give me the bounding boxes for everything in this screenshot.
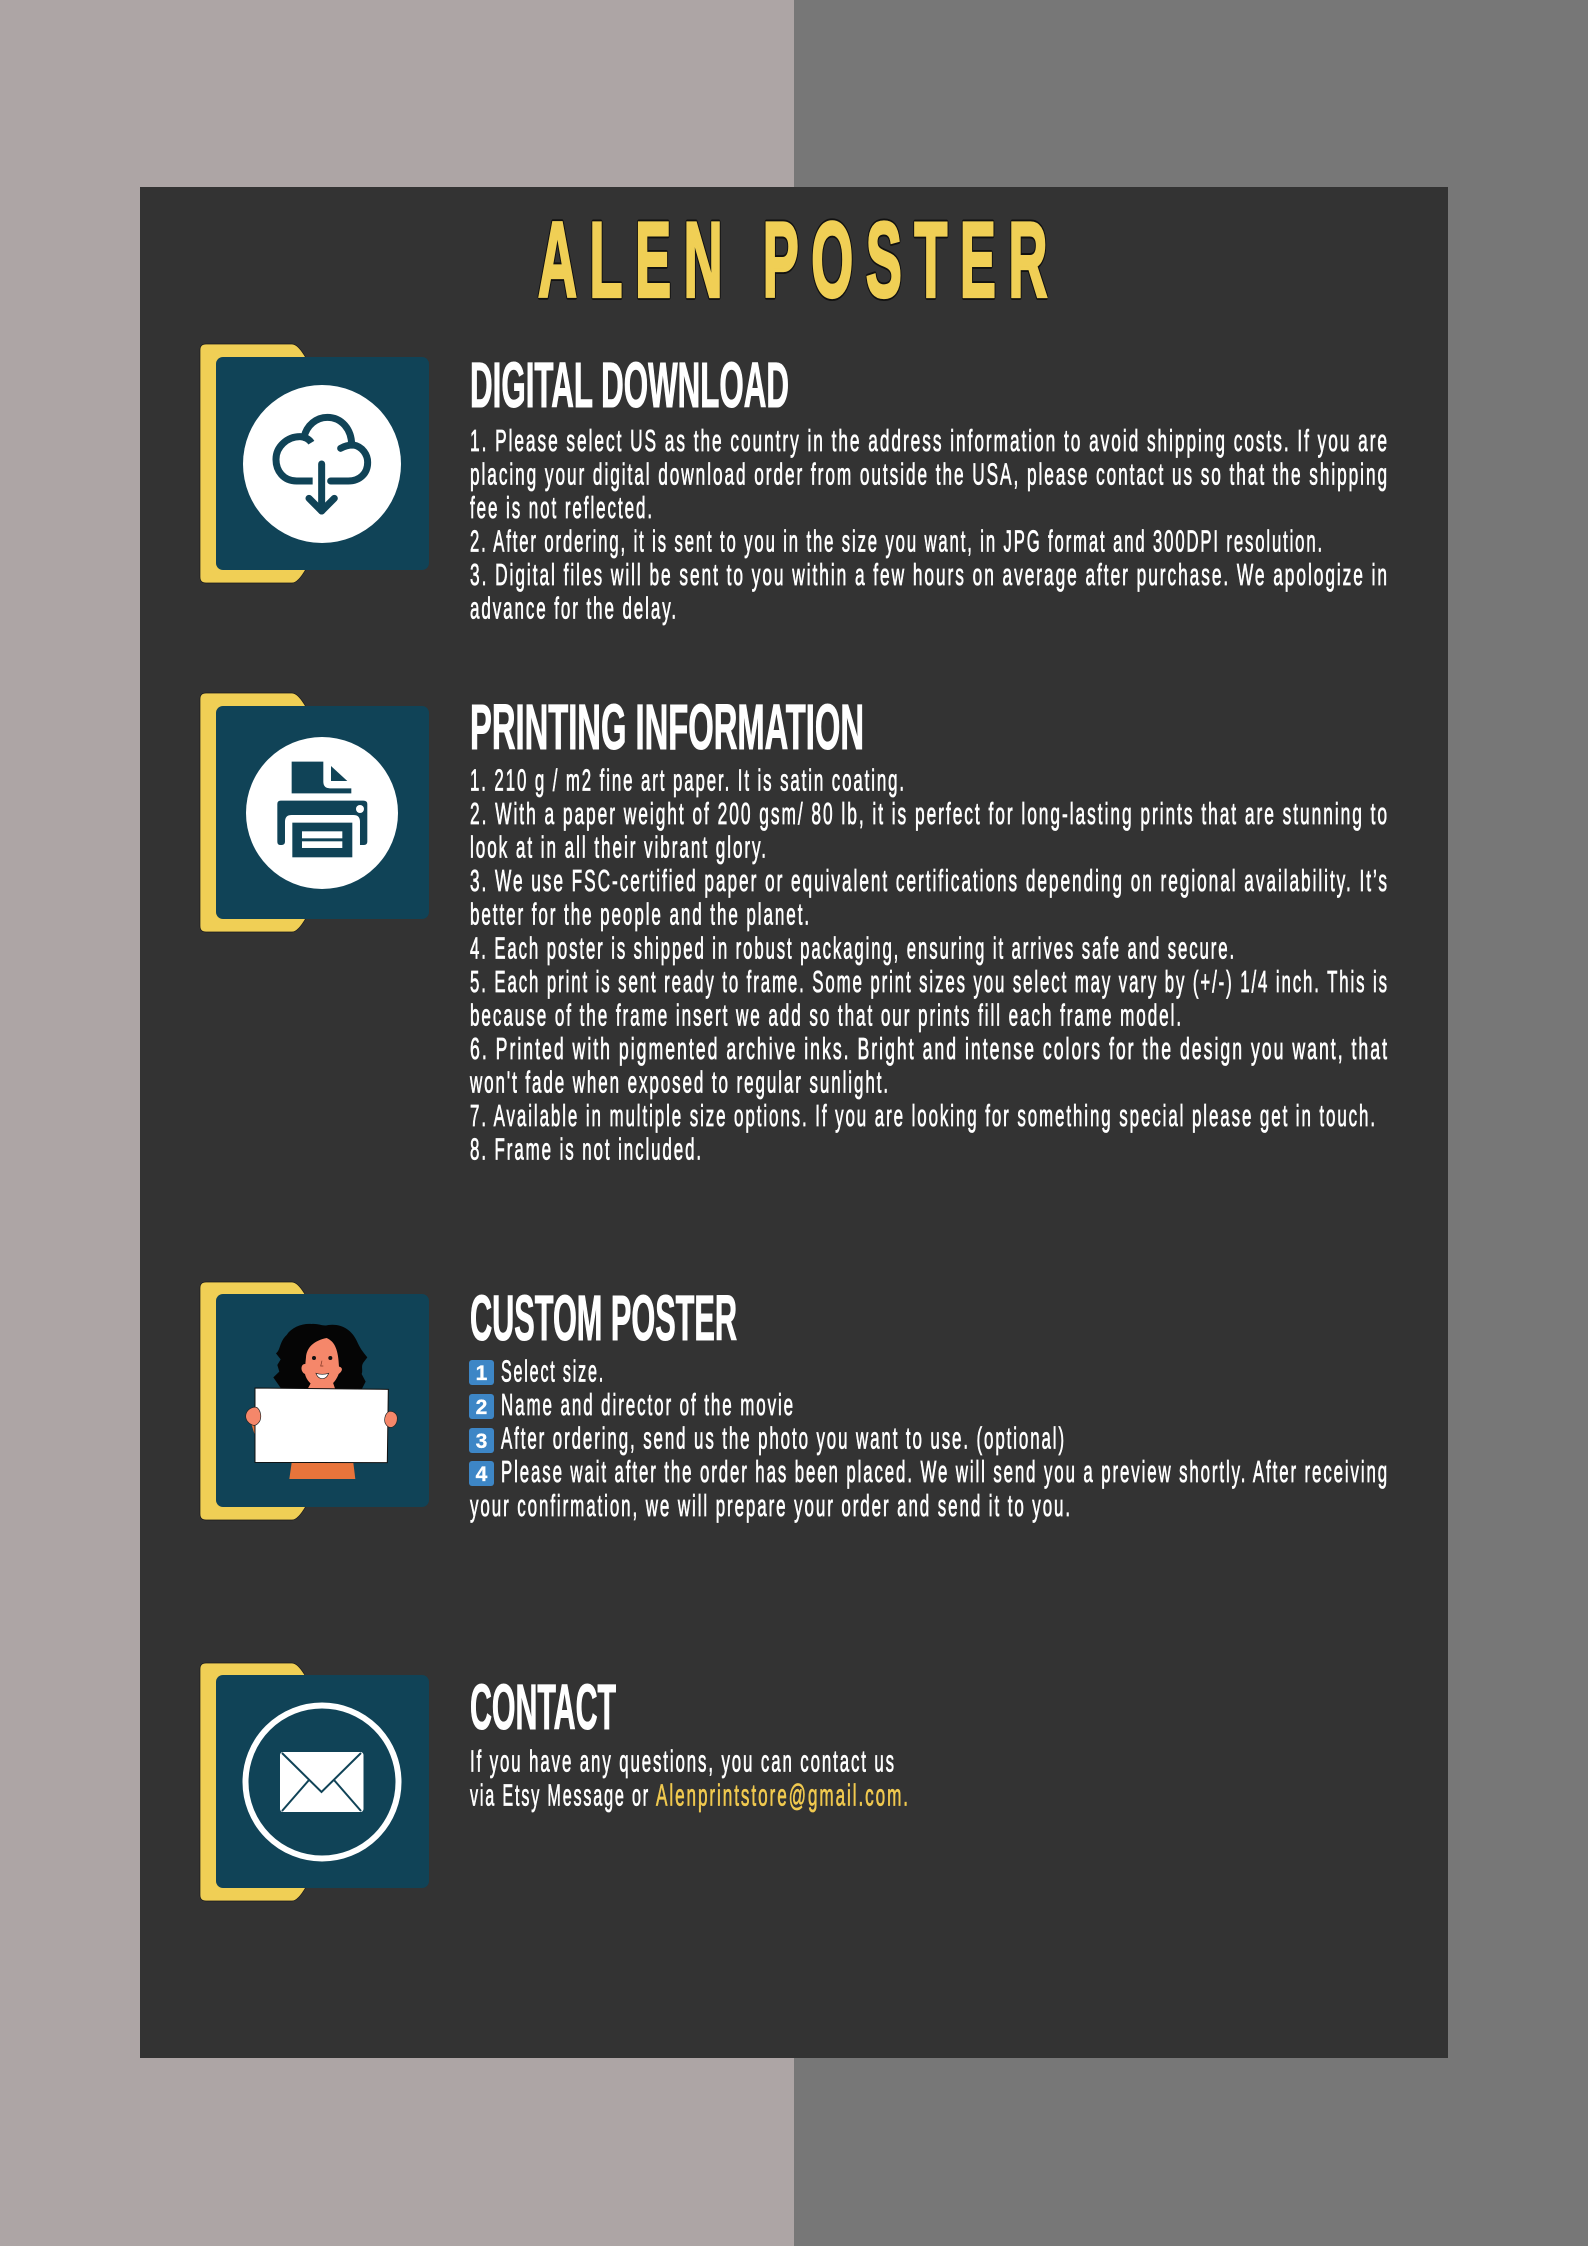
heading: printing information: PRINTING INFORMATION bbox=[470, 691, 864, 763]
section: custom poster bbox=[200, 1282, 1389, 1523]
badge: step 1: 1 bbox=[476, 1362, 488, 1385]
title: ALEN POSTER bbox=[538, 200, 1060, 320]
section: contact bbox=[200, 1663, 910, 1901]
background: left half bbox=[0, 0, 794, 2246]
badge: step 3 bbox=[469, 1428, 494, 1453]
text block: printing information list: look at in all their vibrant glory. bbox=[470, 830, 768, 865]
text block: custom poster steps: After ordering, send us the photo you want to use. (optional) bbox=[501, 1420, 1066, 1456]
badge: step 1 bbox=[469, 1360, 494, 1385]
title: ALEN POSTER bbox=[538, 200, 1060, 320]
section: digital download bbox=[200, 344, 1389, 626]
icon: envelope card bbox=[200, 1663, 429, 1901]
text block: custom poster steps: your confirmation, we will prepare your order and send it to you. bbox=[470, 1488, 1072, 1523]
text block: contact details bbox=[470, 1744, 910, 1812]
text block: printing information list: won't fade when exposed to regular sunlight. bbox=[469, 1064, 890, 1100]
icon: woman holding blank sign card bbox=[200, 1282, 429, 1520]
section: contact: CONTACT bbox=[470, 1671, 616, 1743]
section: digital download: DIGITAL DOWNLOAD bbox=[470, 349, 789, 421]
text block: digital download steps: advance for the delay. bbox=[470, 590, 678, 626]
text block: custom poster steps: Select size. bbox=[501, 1354, 605, 1388]
badge: step 3: 3 bbox=[476, 1430, 487, 1453]
text block: printing information list: better for the people and the planet. bbox=[470, 897, 811, 932]
text block: printing information list bbox=[469, 762, 1389, 1166]
icon: cloud download card bbox=[200, 344, 429, 583]
text block: digital download steps bbox=[470, 423, 1389, 626]
section: custom poster: CUSTOM POSTER bbox=[470, 1282, 737, 1354]
text block: custom poster steps: Name and director of the movie bbox=[501, 1387, 795, 1422]
text block: contact details: Alenprintstore@gmail.com. bbox=[656, 1778, 910, 1812]
text block: printing information list: 1. 210 g / m2 fine art paper. It is satin coating. bbox=[470, 762, 906, 798]
background: right half bbox=[794, 0, 1588, 2246]
text block: custom poster steps bbox=[469, 1354, 1389, 1523]
text block: contact details: If you have any questions, you can contact us bbox=[470, 1744, 896, 1778]
badge: step 2 bbox=[469, 1394, 494, 1419]
text block: digital download steps: fee is not reflected. bbox=[470, 490, 654, 525]
text block: printing information list: 8. Frame is not included. bbox=[470, 1132, 703, 1166]
section: printing information bbox=[200, 691, 1389, 1166]
title bbox=[538, 200, 1060, 320]
main dark panel bbox=[140, 187, 1448, 2058]
text block: contact details: via Etsy Message or bbox=[470, 1778, 650, 1812]
badge: step 4: 4 bbox=[476, 1463, 488, 1486]
icon: printer card bbox=[200, 693, 429, 932]
badge: step 4 bbox=[469, 1461, 494, 1486]
badge: step 2: 2 bbox=[476, 1396, 487, 1419]
